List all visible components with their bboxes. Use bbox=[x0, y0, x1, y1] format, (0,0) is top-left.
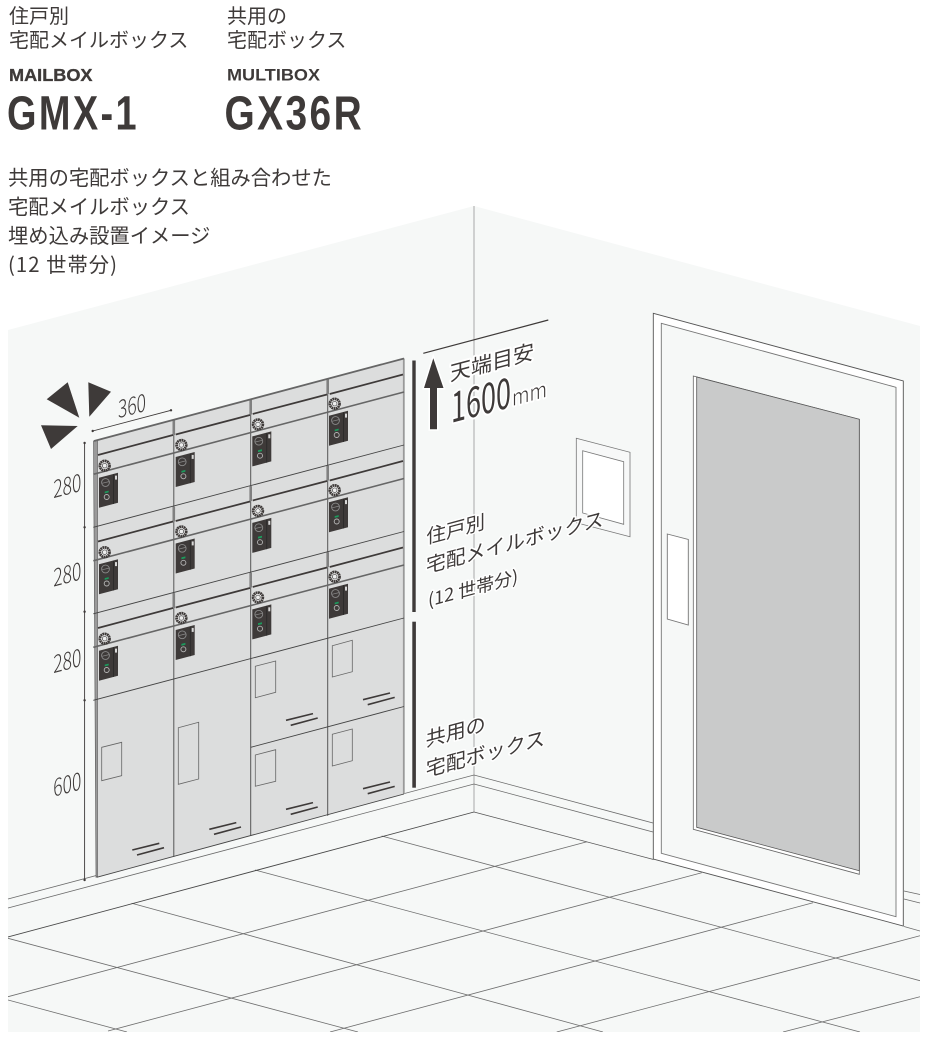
room background bbox=[8, 206, 920, 1032]
height dimensions: 280 bbox=[53, 553, 81, 595]
label: multibox: 宅配ボックス bbox=[426, 721, 545, 783]
door frame bbox=[653, 313, 903, 926]
heading: mailbox product: 宅配メイルボックス bbox=[9, 24, 188, 53]
keypads row 2 bbox=[99, 485, 348, 594]
floor tiles bbox=[8, 812, 920, 1032]
width dimension 360: 360 bbox=[118, 384, 146, 426]
keypads row 1 bbox=[99, 399, 348, 508]
height dimensions bbox=[53, 442, 86, 881]
wall corner line bbox=[473, 206, 475, 812]
model name: GMX-1: GMX-1 bbox=[7, 87, 139, 141]
locker side strip bbox=[94, 440, 98, 877]
mailbox range bar bbox=[412, 360, 416, 612]
height dimensions: 600 bbox=[53, 763, 81, 805]
logo: MAILBOX: MAILBOX bbox=[9, 65, 93, 85]
multibox door handles bbox=[132, 693, 395, 855]
door handle plate bbox=[667, 534, 688, 625]
height dimensions: 280 bbox=[53, 639, 81, 681]
door bbox=[653, 313, 903, 926]
multibox label windows bbox=[102, 640, 352, 786]
height dimensions: 280 bbox=[53, 464, 81, 506]
multibox range bar bbox=[412, 622, 416, 788]
heading: multibox product: 宅配ボックス bbox=[227, 24, 346, 53]
locker bank bbox=[93, 358, 404, 877]
description text: (12 世帯分) bbox=[8, 248, 117, 278]
model name: GX36R: GX36R bbox=[224, 87, 364, 140]
label: mailbox: (12 世帯分) bbox=[428, 563, 518, 613]
door glass frame bbox=[693, 376, 859, 874]
heading: mailbox product bbox=[7, 0, 188, 141]
heading: mailbox product: 住戸別 bbox=[9, 0, 69, 29]
row lines bbox=[93, 358, 404, 877]
column dividers bbox=[174, 358, 404, 857]
top height line bbox=[423, 320, 548, 353]
wall intercom panel bbox=[576, 438, 630, 537]
door glass bbox=[697, 377, 859, 871]
label: multibox: 共用の bbox=[426, 707, 486, 753]
door leaf bbox=[661, 323, 896, 917]
heading: multibox product bbox=[224, 0, 364, 140]
label: mailbox: 宅配メイルボックス bbox=[426, 503, 604, 579]
heading: multibox product: 共用の bbox=[227, 0, 287, 29]
logo: MULTIBOX: MULTIBOX bbox=[227, 66, 321, 84]
skirting board bbox=[8, 775, 920, 908]
locker body bbox=[94, 358, 404, 877]
label: top height guide: 1600 bbox=[451, 361, 511, 436]
label: top height guide: mm bbox=[512, 372, 547, 413]
label: mailbox bbox=[426, 503, 604, 613]
keypads row 3 bbox=[99, 572, 348, 681]
description text: 共用の宅配ボックスと組み合わせた bbox=[8, 161, 332, 191]
description text bbox=[8, 161, 332, 278]
label: mailbox: 住戸別 bbox=[426, 506, 485, 550]
label: top height guide: 天端目安 bbox=[450, 335, 534, 388]
icon: viewing direction triangles bbox=[41, 382, 111, 449]
width dimension 360 bbox=[92, 384, 172, 432]
arrow: up to 1600mm bbox=[424, 358, 444, 429]
description text: 埋め込み設置イメージ bbox=[8, 219, 210, 249]
description text: 宅配メイルボックス bbox=[8, 190, 190, 220]
